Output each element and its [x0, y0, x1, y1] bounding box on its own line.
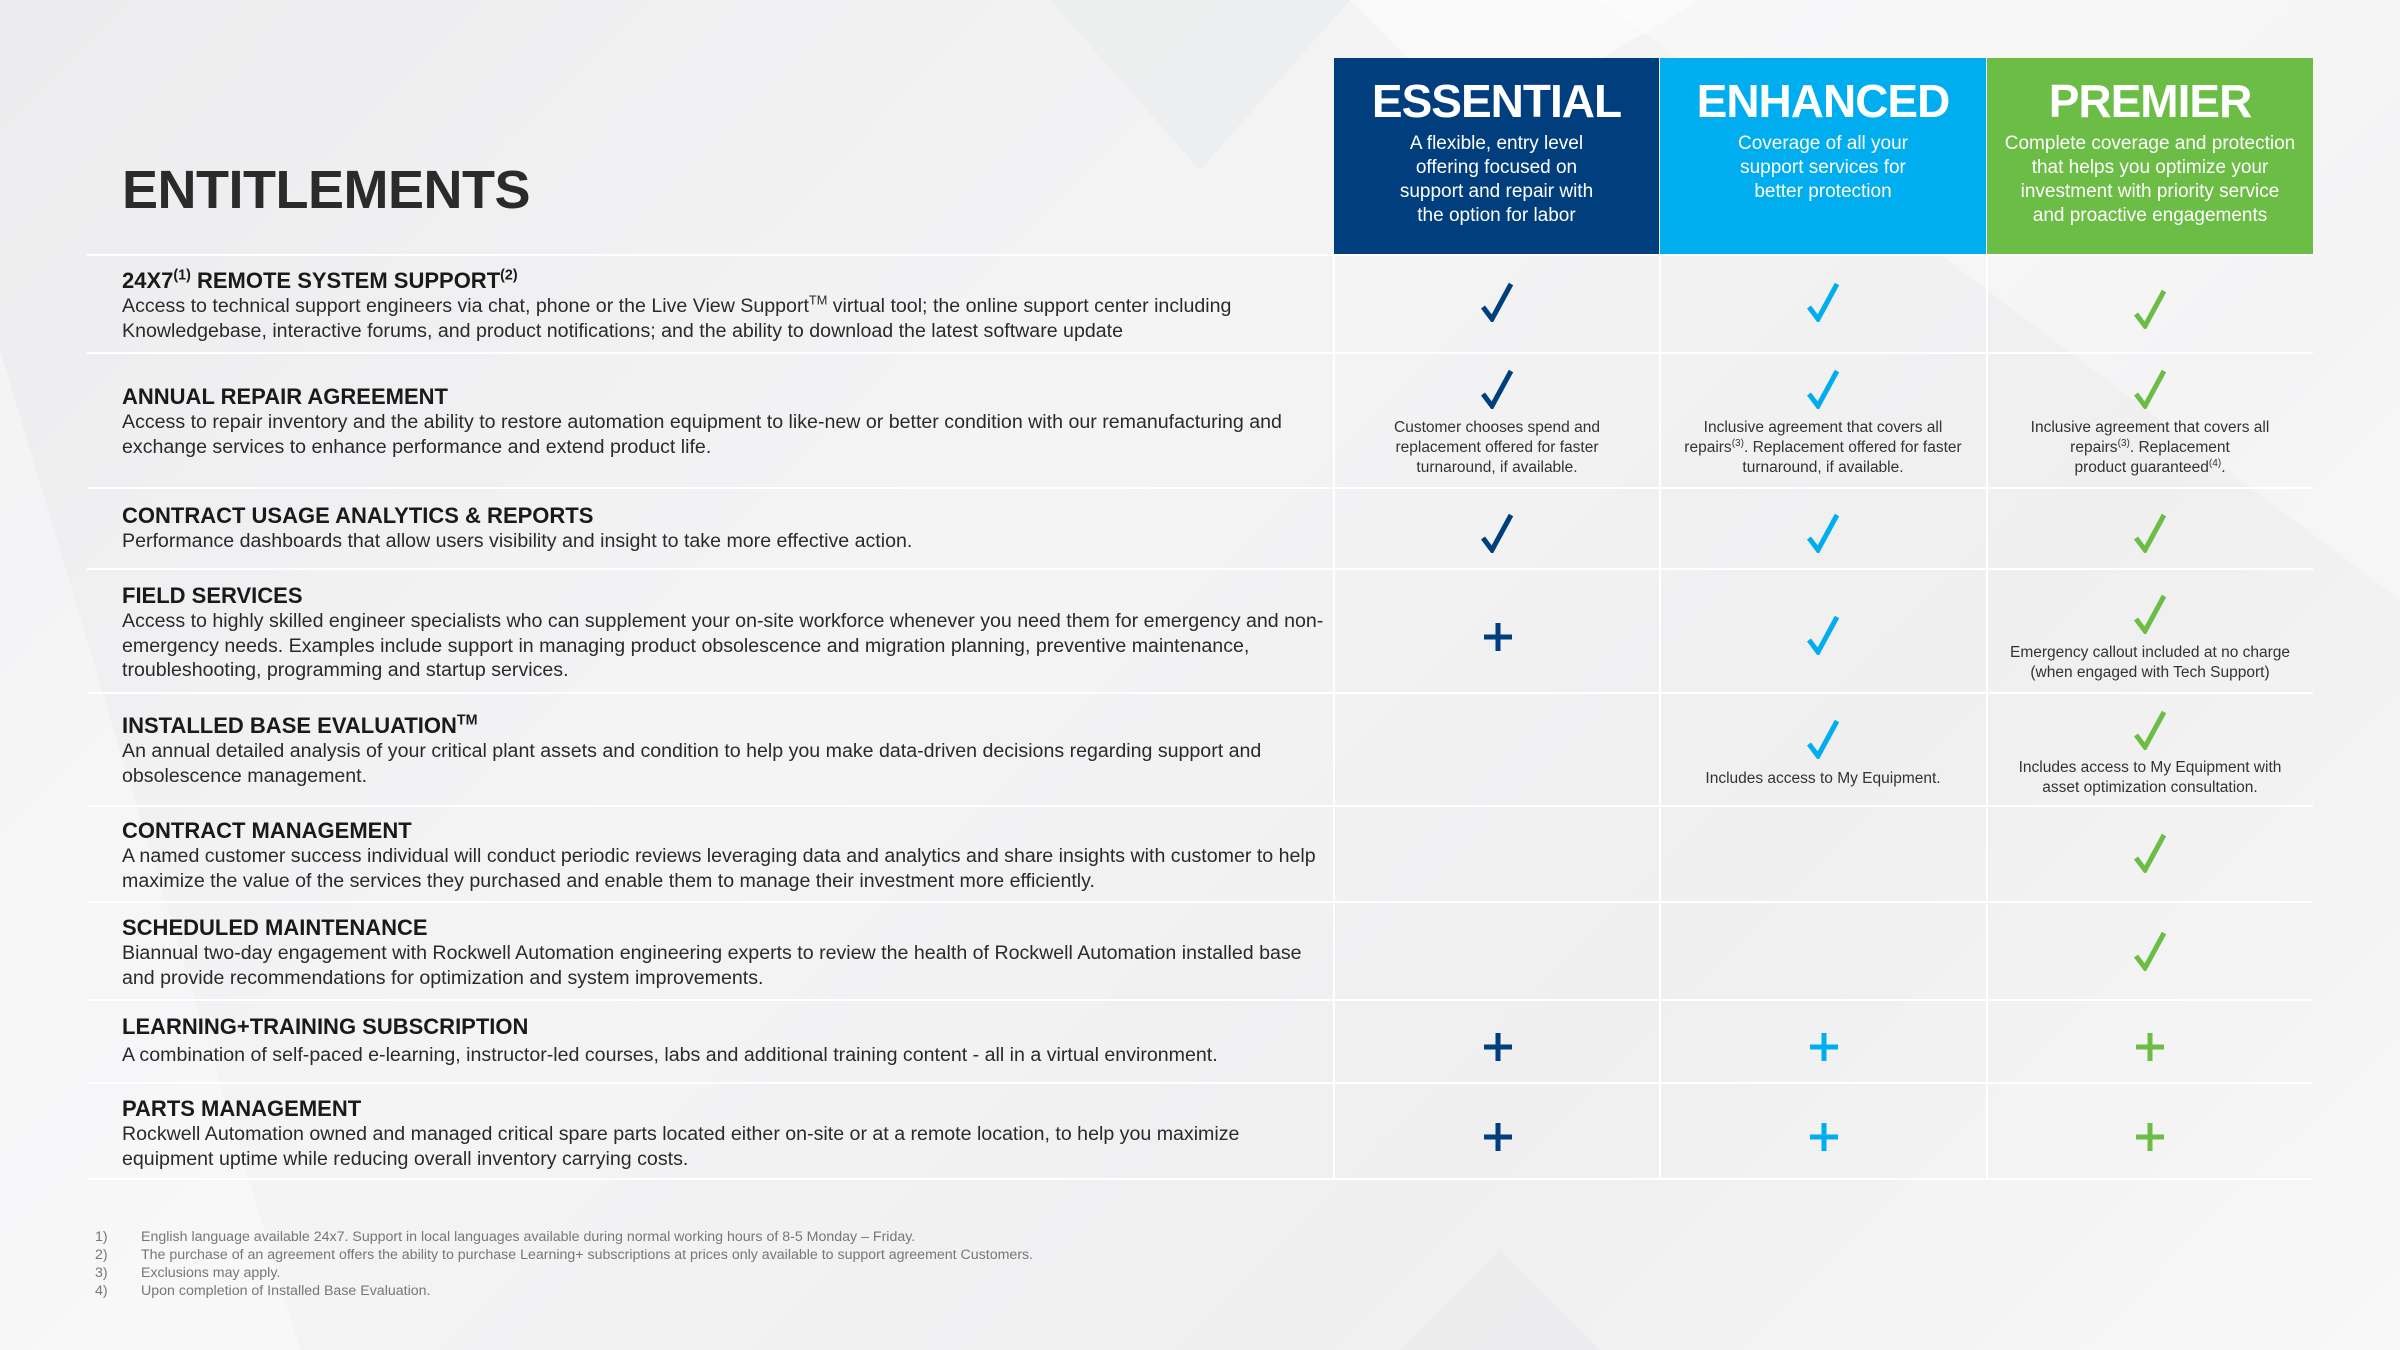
header: essential: offering focused on [1416, 157, 1577, 178]
header: premier: Complete coverage and protection [2005, 133, 2295, 154]
row 5: installed base evaluation [122, 710, 2281, 796]
row 1: remote support: Knowledgebase, interactive forums, and product notifications; and the ability to download the latest software update [122, 320, 1123, 342]
header: enhanced [1660, 58, 1986, 254]
header: essential: A flexible, entry level [1410, 133, 1583, 154]
row 5: installed base evaluation: obsolescence management. [122, 764, 367, 786]
row 2: annual repair: Access to repair inventory and the ability to restore automation equipment to like-new or better condition with our remanufacturing and [122, 411, 1282, 433]
row 6: contract management: CONTRACT MANAGEMENT [122, 818, 412, 843]
row 2: annual repair: replacement offered for faster [1395, 439, 1599, 456]
row 3: analytics: CONTRACT USAGE ANALYTICS & REPORTS [122, 503, 593, 528]
row 3: analytics: Performance dashboards that allow users visibility and insight to take more effective action. [122, 530, 912, 552]
header: premier: investment with priority service [2021, 181, 2279, 202]
row 2: annual repair: repairs(3). Replacement offered for faster [1684, 438, 1962, 456]
row 2: annual repair: Customer chooses spend and [1394, 419, 1600, 436]
footnotes: English language available 24x7. Support in local languages available during normal working hours of 8-5 Monday – Friday. [141, 1229, 915, 1245]
header: essential [1334, 58, 1659, 254]
row 9: parts management [122, 1096, 2164, 1170]
row 5: installed base evaluation: INSTALLED BASE EVALUATIONTM [122, 713, 478, 738]
row 8: learning subscription [122, 1014, 2164, 1066]
row 4: field services: troubleshooting, programming and startup services. [122, 659, 569, 681]
row 2: annual repair: repairs(3). Replacement [2070, 438, 2230, 456]
footnotes: 3) [95, 1265, 108, 1281]
row 4: field services: (when engaged with Tech Support) [2030, 664, 2270, 681]
row 6: contract management [122, 818, 2166, 892]
row 5: installed base evaluation: asset optimization consultation. [2042, 779, 2258, 796]
row 2: annual repair: exchange services to enhance performance and extend product life. [122, 436, 711, 458]
footnotes: 4) [95, 1283, 108, 1299]
header: enhanced: Coverage of all your [1738, 133, 1908, 154]
footnotes: 1) [95, 1229, 108, 1245]
row 2: annual repair: product guaranteed(4). [2074, 458, 2226, 476]
footnotes: The purchase of an agreement offers the ability to purchase Learning+ subscriptions at prices only available to support agreement Customers. [141, 1247, 1033, 1263]
row 5: installed base evaluation: Includes access to My Equipment. [1705, 770, 1941, 787]
header: essential: ESSENTIAL [1372, 75, 1621, 127]
row 4: field services: Emergency callout included at no charge [2010, 644, 2290, 661]
row 9: parts management: PARTS MANAGEMENT [122, 1096, 361, 1121]
row 1: remote support: 24X7(1) REMOTE SYSTEM SUPPORT(2) [122, 268, 518, 293]
header: enhanced: support services for [1740, 157, 1906, 178]
row 8: learning subscription: A combination of self-paced e-learning, instructor-led courses, labs and additional training content - all in a virtual environment. [122, 1044, 1218, 1066]
footnotes: 2) [95, 1247, 108, 1263]
header: premier [1987, 58, 2313, 254]
row 2: annual repair: turnaround, if available. [1416, 459, 1578, 476]
row 1: remote support [122, 268, 2166, 342]
row 7: scheduled maintenance: and provide recommendations for optimization and system improvements. [122, 966, 763, 988]
row 2: annual repair [122, 370, 2269, 476]
row 7: scheduled maintenance: Biannual two-day engagement with Rockwell Automation engineering experts to review the health of Rockwell Automation installed base [122, 942, 1302, 964]
header: premier: PREMIER [2049, 75, 2251, 127]
header: essential: support and repair with [1400, 181, 1593, 202]
table grid [87, 254, 2313, 1180]
row 7: scheduled maintenance: SCHEDULED MAINTENANCE [122, 915, 428, 940]
header: premier: that helps you optimize your [2032, 157, 2268, 178]
footnotes: Upon completion of Installed Base Evaluation. [141, 1283, 430, 1299]
row 2: annual repair: Inclusive agreement that covers all [1704, 419, 1942, 436]
row 6: contract management: maximize the value of the services they purchased and enable them to manage their investment more efficiently. [122, 870, 1095, 892]
row 2: annual repair: Inclusive agreement that covers all [2031, 419, 2269, 436]
row 9: parts management: Rockwell Automation owned and managed critical spare parts located either on-site or at a remote location, to help you maximize [122, 1123, 1239, 1145]
header: premier: and proactive engagements [2033, 205, 2267, 226]
header: essential: the option for labor [1417, 205, 1576, 226]
row 2: annual repair: turnaround, if available. [1742, 459, 1904, 476]
row 9: parts management: equipment uptime while reducing overall inventory carrying costs. [122, 1148, 688, 1170]
row 4: field services [122, 583, 2290, 681]
footnotes: Exclusions may apply. [141, 1265, 280, 1281]
row 8: learning subscription: LEARNING+TRAINING SUBSCRIPTION [122, 1014, 528, 1039]
footnotes [95, 1229, 1033, 1299]
row 1: remote support: Access to technical support engineers via chat, phone or the Live View SupportTM virtual tool; the online support center including [122, 292, 1231, 317]
row 5: installed base evaluation: An annual detailed analysis of your critical plant assets and condition to help you make data-driven decisions regarding support and [122, 740, 1261, 762]
row 4: field services: Access to highly skilled engineer specialists who can supplement your on-site workforce whenever you need them for emergency and non- [122, 610, 1323, 632]
row 4: field services: emergency needs. Examples include support in managing product obsolescence and migration planning, preventive maintenance, [122, 634, 1249, 656]
row 5: installed base evaluation: Includes access to My Equipment with [2019, 759, 2281, 776]
title: ENTITLEMENTS [122, 160, 530, 220]
header: enhanced: better protection [1754, 181, 1892, 202]
row 2: annual repair: ANNUAL REPAIR AGREEMENT [122, 384, 448, 409]
row 4: field services: FIELD SERVICES [122, 583, 303, 608]
row 7: scheduled maintenance [122, 915, 2166, 988]
header: enhanced: ENHANCED [1697, 75, 1949, 127]
row 3: analytics [122, 503, 2166, 553]
row 6: contract management: A named customer success individual will conduct periodic reviews leveraging data and analytics and share insights with customer to help [122, 845, 1316, 867]
